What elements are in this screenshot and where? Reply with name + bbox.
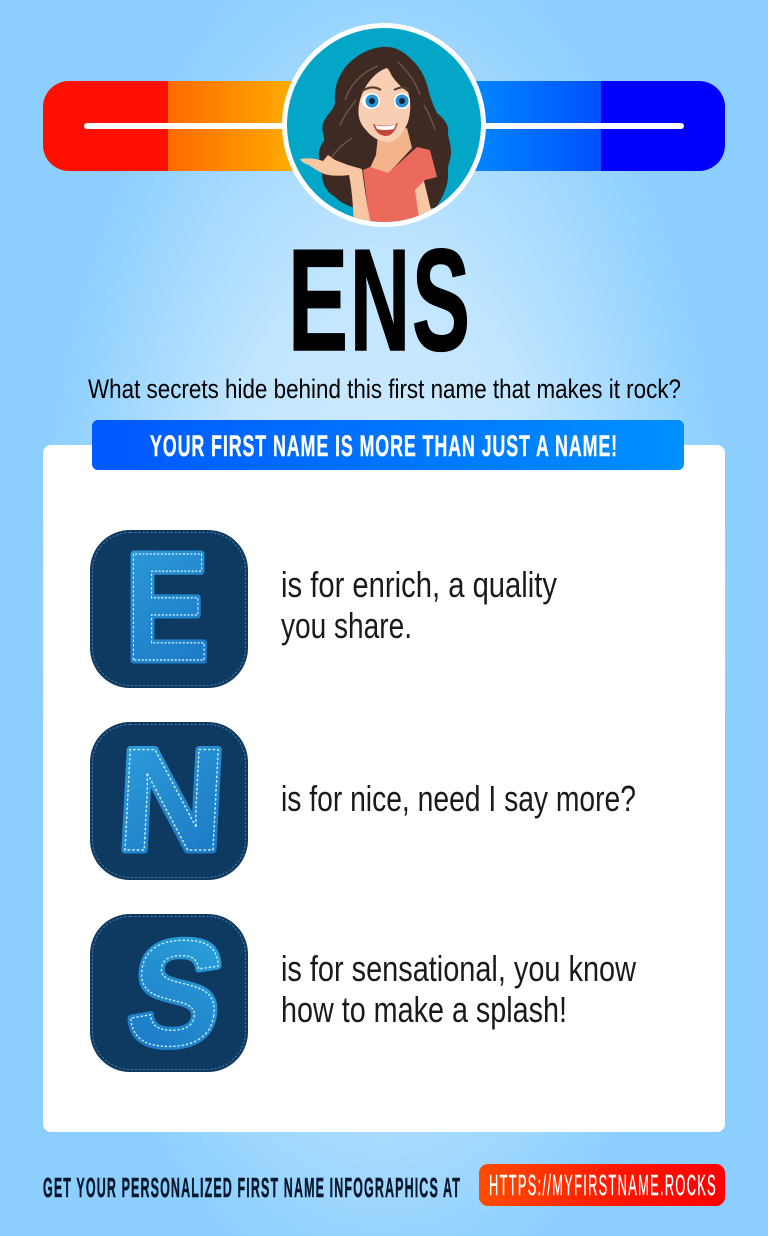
text: E line	[281, 564, 557, 646]
icon: letter N: N	[113, 718, 230, 881]
eyes	[362, 93, 380, 109]
header colour bar	[43, 81, 725, 171]
title: E	[288, 219, 348, 381]
text: S line: is for sensational, you know	[281, 948, 637, 989]
text: S line: how to make a splash!	[281, 989, 567, 1030]
text: E line: you share.	[281, 605, 412, 646]
icon: letter E	[90, 521, 248, 693]
text: N line: is for nice, need I say more?	[281, 778, 636, 819]
white content panel	[43, 445, 725, 1132]
title: S	[412, 219, 470, 381]
avatar: woman with long brown hair	[282, 23, 486, 227]
neck	[370, 128, 412, 176]
right arm	[414, 181, 431, 218]
shirt	[363, 147, 437, 225]
banner	[92, 420, 684, 470]
mouth	[373, 123, 398, 136]
text: E line: is for enrich, a quality	[281, 564, 557, 605]
title: N	[350, 219, 410, 381]
face	[358, 68, 410, 142]
hair highlights	[330, 62, 435, 160]
footer url button	[479, 1164, 725, 1206]
icon: letter E: E	[125, 521, 209, 693]
text: S line	[281, 948, 637, 1030]
icon: letter N: N	[113, 718, 230, 881]
icon: letter S: S	[119, 910, 234, 1077]
icon: letter S: S	[119, 910, 234, 1077]
arm and hand	[300, 155, 371, 225]
hair	[319, 47, 451, 209]
icon: letter E: E	[125, 521, 209, 693]
title	[288, 219, 470, 381]
